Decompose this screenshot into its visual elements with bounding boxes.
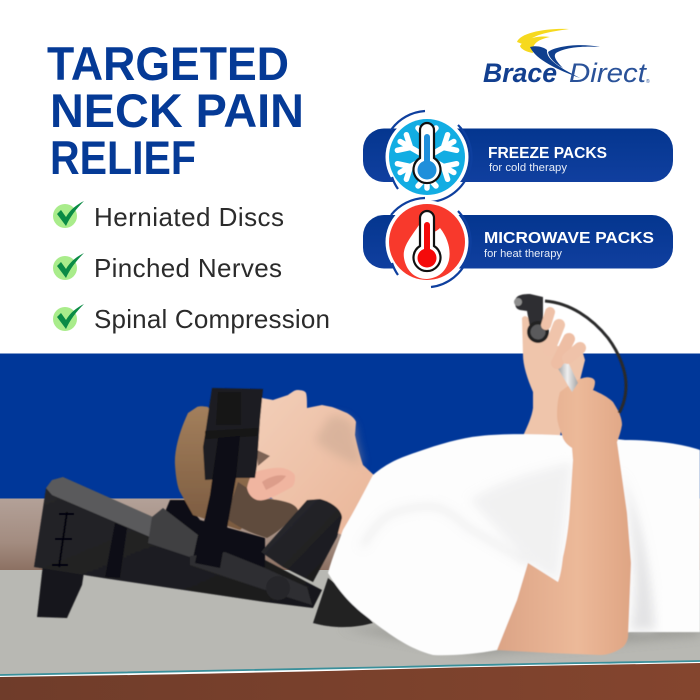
benefit: spinal compression: Spinal Compression bbox=[94, 304, 330, 334]
shadow under man bbox=[340, 626, 700, 655]
head strap bbox=[195, 388, 263, 568]
freeze label: FREEZE PACKS bbox=[488, 145, 607, 162]
hair bbox=[175, 406, 262, 530]
upper forearm and palm bbox=[522, 316, 585, 436]
microwave label: MICROWAVE PACKS bbox=[484, 230, 654, 247]
device leg bbox=[37, 564, 84, 618]
icon: heat thermometer bbox=[414, 211, 440, 271]
benefits list bbox=[53, 201, 330, 334]
title bbox=[47, 37, 304, 184]
pump metal handle bbox=[557, 362, 578, 392]
title: RELIEF bbox=[50, 131, 196, 184]
white ring: freeze bbox=[386, 116, 468, 198]
heat icon circle bbox=[389, 204, 465, 280]
device rail bbox=[190, 552, 312, 605]
device top rail bbox=[46, 477, 153, 537]
pump head cap bbox=[514, 298, 522, 306]
photo: man on neck traction device bbox=[34, 294, 700, 655]
back shadow bbox=[620, 470, 655, 630]
benefit: pinched nerves: Pinched Nerves bbox=[94, 253, 282, 283]
ear inner bbox=[262, 475, 286, 490]
mat edge bbox=[0, 661, 700, 675]
neck and face bbox=[252, 390, 377, 535]
title: NECK PAIN bbox=[50, 84, 304, 137]
head pad bbox=[158, 500, 265, 572]
pump fingers bbox=[546, 312, 580, 363]
wood floor foreground bbox=[0, 663, 700, 700]
brand logo: ® bbox=[646, 78, 650, 85]
short hair below ear bbox=[226, 482, 298, 538]
outer arcs: microwave bbox=[391, 198, 471, 287]
ear bbox=[247, 468, 295, 500]
t-shirt bbox=[328, 434, 700, 655]
floor behind mat bbox=[0, 498, 700, 572]
white ring: microwave bbox=[386, 200, 468, 284]
freeze icon circle bbox=[389, 119, 465, 195]
brand logo: Brace bbox=[483, 58, 557, 88]
icon: cold thermometer bbox=[414, 123, 440, 183]
sideburn bbox=[257, 450, 270, 466]
title: TARGETED bbox=[47, 37, 289, 90]
strap velcro panel bbox=[216, 392, 241, 425]
device wedge body bbox=[34, 488, 322, 608]
outer arcs: freeze bbox=[391, 111, 472, 202]
badge: microwave packs bbox=[363, 198, 673, 287]
device cradle bbox=[148, 508, 198, 558]
microwave sublabel: for heat therapy bbox=[484, 248, 562, 260]
traction device bbox=[34, 477, 373, 627]
icon: flame bbox=[404, 222, 450, 279]
device band bbox=[105, 523, 127, 578]
strap band bbox=[205, 428, 258, 439]
vertical strap bbox=[195, 436, 240, 568]
device knob bbox=[266, 576, 290, 600]
stubble shading bbox=[315, 416, 362, 465]
pump hose bbox=[545, 301, 626, 413]
brand logo bbox=[483, 29, 650, 88]
icon: snowflake bbox=[396, 126, 458, 188]
hand pump gauge bbox=[514, 294, 626, 413]
exercise mat bbox=[0, 570, 700, 675]
neck pad bbox=[261, 499, 342, 582]
device base block bbox=[313, 578, 373, 627]
brand logo: Direct bbox=[569, 58, 648, 88]
pump head bbox=[515, 294, 543, 328]
shirt sleeve fold bbox=[362, 507, 528, 563]
benefit: herniated discs: Herniated Discs bbox=[94, 202, 284, 232]
freeze sublabel: for cold therapy bbox=[489, 162, 568, 174]
chest shadow bbox=[470, 462, 572, 582]
pressure dial bbox=[527, 321, 549, 343]
device slot bbox=[52, 512, 74, 567]
blue band bbox=[0, 354, 700, 514]
badge: freeze packs bbox=[363, 111, 673, 202]
lower arm bbox=[497, 377, 631, 655]
